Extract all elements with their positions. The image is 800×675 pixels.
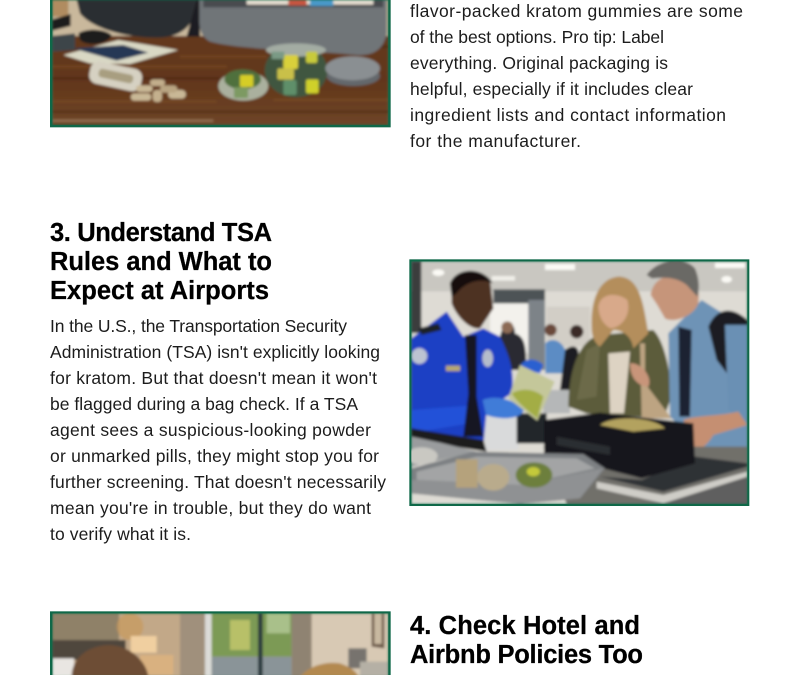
text block: packing tip paragraph: ingredient lists and contact information — [410, 105, 726, 125]
text block: TSA paragraph: In the U.S., the Transportation Security — [50, 316, 347, 336]
photo: hotel room with two guests — [50, 611, 391, 675]
text block: packing tip paragraph: for the manufacturer. — [410, 131, 581, 151]
heading: section 4: Airbnb Policies Too — [410, 641, 643, 669]
text block: TSA paragraph: be flagged during a bag check. If a TSA — [50, 394, 358, 414]
text block: TSA paragraph: for kratom. But that doesn't mean it won't — [50, 368, 377, 388]
text block: TSA paragraph: or unmarked pills, they might stop you for — [50, 446, 379, 466]
text block: TSA paragraph — [50, 316, 386, 544]
heading: section 3: Rules and What to — [50, 248, 272, 276]
text block: packing tip paragraph: helpful, especially if it includes clear — [410, 79, 693, 99]
heading: section 3: 3. Understand TSA — [50, 219, 272, 247]
text block: packing tip paragraph: everything. Original packaging is — [410, 53, 668, 73]
text block: packing tip paragraph: of the best options. Pro tip: Label — [410, 27, 664, 47]
trays — [411, 437, 477, 467]
heading: section 3: Expect at Airports — [50, 277, 269, 305]
heading: section 4 — [410, 612, 643, 669]
heading: section 4: 4. Check Hotel and — [410, 612, 640, 640]
text block: TSA paragraph: to verify what it is. — [50, 524, 191, 544]
text block: TSA paragraph: mean you're in trouble, but they do want — [50, 498, 371, 518]
officer — [411, 312, 513, 447]
text block: packing tip paragraph: flavor-packed kratom gummies are some — [410, 1, 743, 21]
suitcase — [544, 413, 695, 478]
woman — [568, 330, 672, 418]
text block: packing tip paragraph — [410, 1, 743, 151]
photo: TSA agent inspecting a bag with two travelers — [406, 259, 749, 506]
photo: travel bags, capsules and gummies on a table — [50, 0, 391, 127]
man — [668, 300, 747, 450]
counter and conveyor — [543, 447, 747, 504]
text block: TSA paragraph: Administration (TSA) isn't explicitly looking — [50, 342, 380, 362]
text block: TSA paragraph: agent sees a suspicious-looking powder — [50, 420, 371, 440]
text block: TSA paragraph: further screening. That doesn't necessarily — [50, 472, 386, 492]
heading: section 3 — [50, 219, 272, 305]
